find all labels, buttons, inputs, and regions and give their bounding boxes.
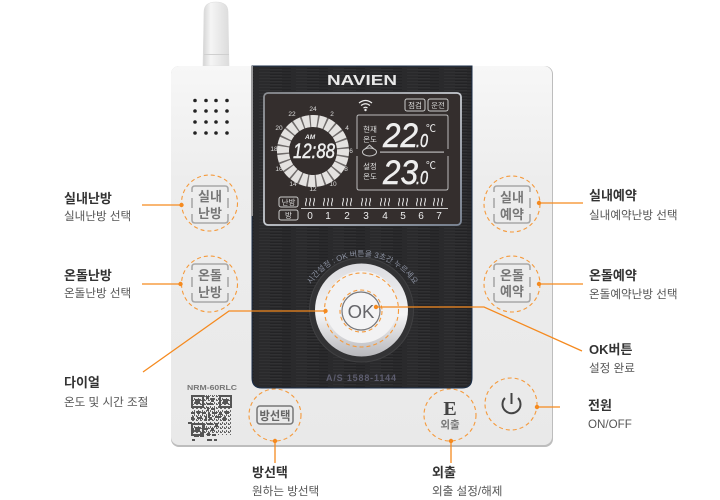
button: ondol reservation: [484, 256, 540, 312]
button: indoor heating: 난방: [198, 206, 222, 221]
button: indoor reservation: 예약: [500, 207, 524, 222]
current temperature: 온도: [363, 135, 377, 144]
button: room select: [249, 389, 301, 441]
clock hour labels: 22: [288, 111, 296, 118]
leader lines: [142, 201, 583, 463]
label: dial: 다이얼: [64, 375, 100, 390]
clock hour labels: 8: [344, 166, 348, 173]
room numbers: 1: [325, 211, 331, 222]
model name: NRM-60RLC: [187, 385, 237, 392]
label: indoor heating: [64, 191, 131, 223]
set temperature: [357, 154, 448, 192]
room numbers: 3: [363, 211, 369, 222]
dial hint text: 시간설정 : OK 버튼을 3초간 누르세요: [308, 250, 418, 284]
button: indoor reservation: [484, 176, 540, 232]
device body: [171, 66, 553, 447]
button: ondol heating: 온돌: [198, 268, 222, 283]
room numbers: 7: [436, 211, 442, 222]
label: indoor heating: 실내난방 선택: [64, 210, 131, 223]
room numbers: 5: [400, 211, 406, 222]
label: ondol heating: 온돌난방: [64, 268, 112, 283]
button: indoor heating: 실내: [198, 189, 222, 204]
label: OK button: OK버튼: [589, 342, 632, 357]
button: away: E: [443, 398, 457, 420]
current temperature: [357, 115, 448, 155]
label: ondol heating: 온돌난방 선택: [64, 287, 131, 300]
current temperature: 22: [382, 117, 418, 155]
room tags: 난방: [282, 197, 295, 207]
label: indoor heating: 실내난방: [64, 191, 112, 206]
clock hour labels: 6: [349, 148, 353, 155]
divider with icon: [362, 145, 444, 156]
clock hour labels: 18: [270, 146, 278, 153]
label: away: 외출 설정/해제: [432, 485, 502, 498]
button: ondol reservation: 온돌: [500, 268, 524, 283]
label: power: [588, 398, 632, 431]
room numbers: 0: [307, 211, 313, 222]
dial: [310, 258, 414, 362]
current temperature: .0: [416, 131, 428, 151]
set temperature: 23: [382, 154, 418, 192]
clock time: 12:88: [293, 140, 335, 163]
button: ondol reservation: 예약: [500, 284, 524, 299]
set temperature: 설정: [363, 161, 377, 171]
speaker holes: [193, 99, 229, 135]
button: away: 외출: [440, 419, 460, 431]
label: dial: [64, 375, 148, 409]
clock hour labels: 24: [309, 106, 317, 113]
current temperature: ℃: [426, 124, 436, 135]
room tags: [279, 197, 298, 220]
clock hour labels: 16: [275, 166, 283, 173]
set temperature: ℃: [426, 161, 436, 172]
clock time: AM: [304, 134, 316, 141]
clock hour labels: 4: [345, 125, 349, 132]
status tags: 점검: [408, 100, 422, 110]
label: power: ON/OFF: [588, 418, 632, 431]
clock hour labels: [270, 106, 353, 193]
status tags: [405, 99, 448, 111]
room numbers: [307, 211, 442, 222]
label: room select: 원하는 방선택: [252, 484, 319, 498]
dial and OK rings: [324, 273, 398, 347]
dial: OK: [348, 301, 375, 322]
label: ondol heating: [64, 268, 131, 300]
black brushed panel: [251, 66, 472, 388]
label: ondol reservation: [589, 268, 678, 301]
label: room select: [252, 465, 319, 498]
label: OK button: [589, 342, 635, 375]
clock hour labels: 12: [309, 186, 317, 193]
clock time: [293, 134, 335, 163]
button: power: [485, 378, 537, 430]
LCD screen: [264, 93, 461, 225]
brand logo: NAVIEN: [327, 73, 397, 89]
set temperature: 온도: [363, 172, 377, 181]
label: indoor reservation: 실내예약난방 선택: [589, 208, 678, 222]
label: ondol reservation: 온돌예약: [589, 268, 637, 283]
button: ondol heating: 난방: [198, 285, 222, 300]
button: ondol heating: [182, 256, 238, 312]
A/S number: A/S 1588-1144: [326, 373, 396, 383]
label: away: 외출: [432, 465, 456, 480]
current temperature: 현재: [363, 125, 377, 134]
button: room select: 방선택: [260, 409, 290, 423]
wifi icon: [359, 100, 372, 111]
label: power: 전원: [588, 398, 612, 413]
room numbers: 2: [344, 211, 350, 222]
status tags: 운전: [431, 100, 445, 110]
clock hour labels: 20: [275, 125, 283, 132]
antenna: [203, 2, 229, 66]
label: away: [432, 465, 502, 498]
clock hour labels: 10: [329, 181, 337, 188]
label: room select: 방선택: [252, 465, 288, 480]
button: indoor heating: [182, 175, 238, 231]
heat marks: [306, 198, 442, 206]
clock ring: [281, 119, 345, 183]
set temperature: .0: [416, 168, 428, 188]
button: indoor reservation: 실내: [500, 190, 524, 205]
room numbers: 6: [418, 211, 424, 222]
label: indoor reservation: 실내예약: [589, 188, 637, 203]
label: OK button: 설정 완료: [589, 362, 635, 375]
clock hour labels: 14: [289, 181, 297, 188]
label: ondol reservation: 온돌예약난방 선택: [589, 287, 678, 301]
label: indoor reservation: [589, 188, 678, 222]
room numbers: 4: [382, 211, 388, 222]
room tags: 방: [285, 210, 292, 220]
button: away: [424, 389, 476, 441]
clock hour labels: 2: [330, 111, 334, 118]
label: dial: 온도 및 시간 조절: [64, 395, 148, 409]
QR code: [188, 395, 232, 441]
